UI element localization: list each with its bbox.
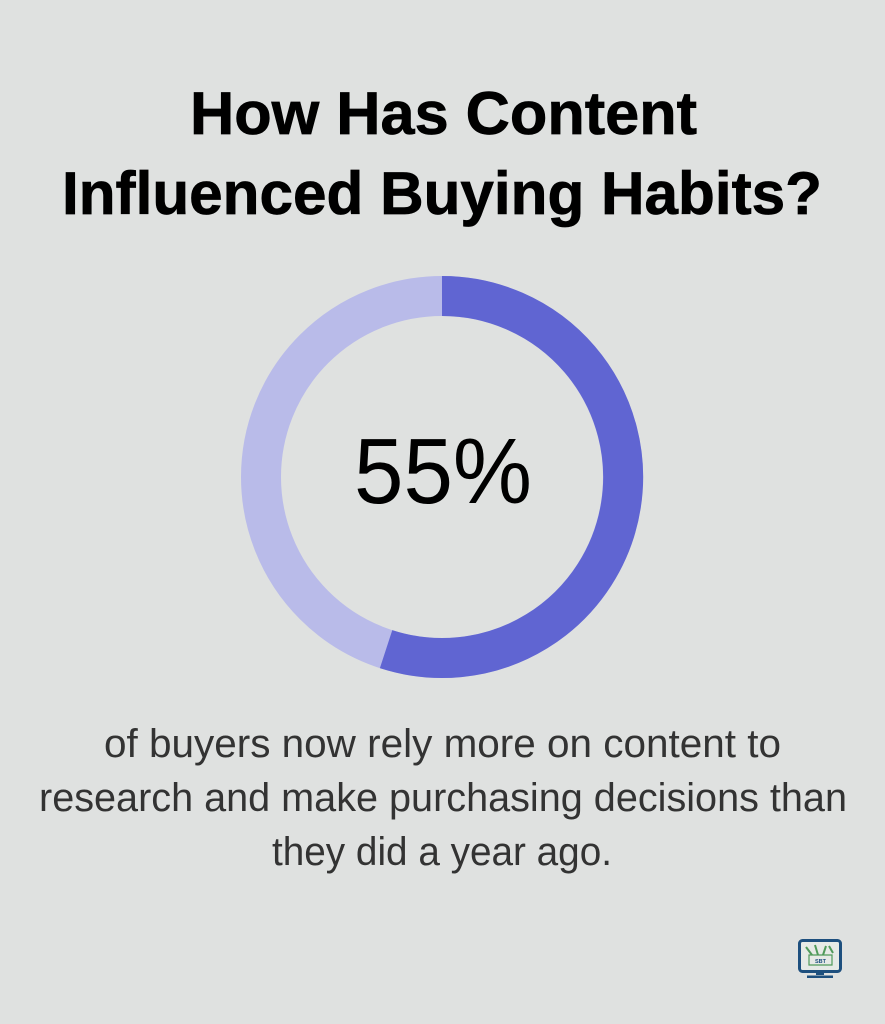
description text: of buyers now rely more on content to — [104, 722, 781, 766]
description text: they did a year ago. — [272, 830, 612, 874]
title: Influenced Buying Habits? — [62, 160, 822, 227]
donut value: 55% — [354, 419, 532, 523]
title — [62, 80, 822, 227]
icon: monitor toolbox logo: SBT — [815, 959, 827, 965]
donut chart: 55 percent — [261, 296, 623, 658]
description text — [39, 722, 847, 874]
description text: research and make purchasing decisions than — [39, 776, 847, 820]
title: How Has Content — [190, 80, 697, 147]
icon: monitor toolbox logo — [800, 940, 840, 978]
